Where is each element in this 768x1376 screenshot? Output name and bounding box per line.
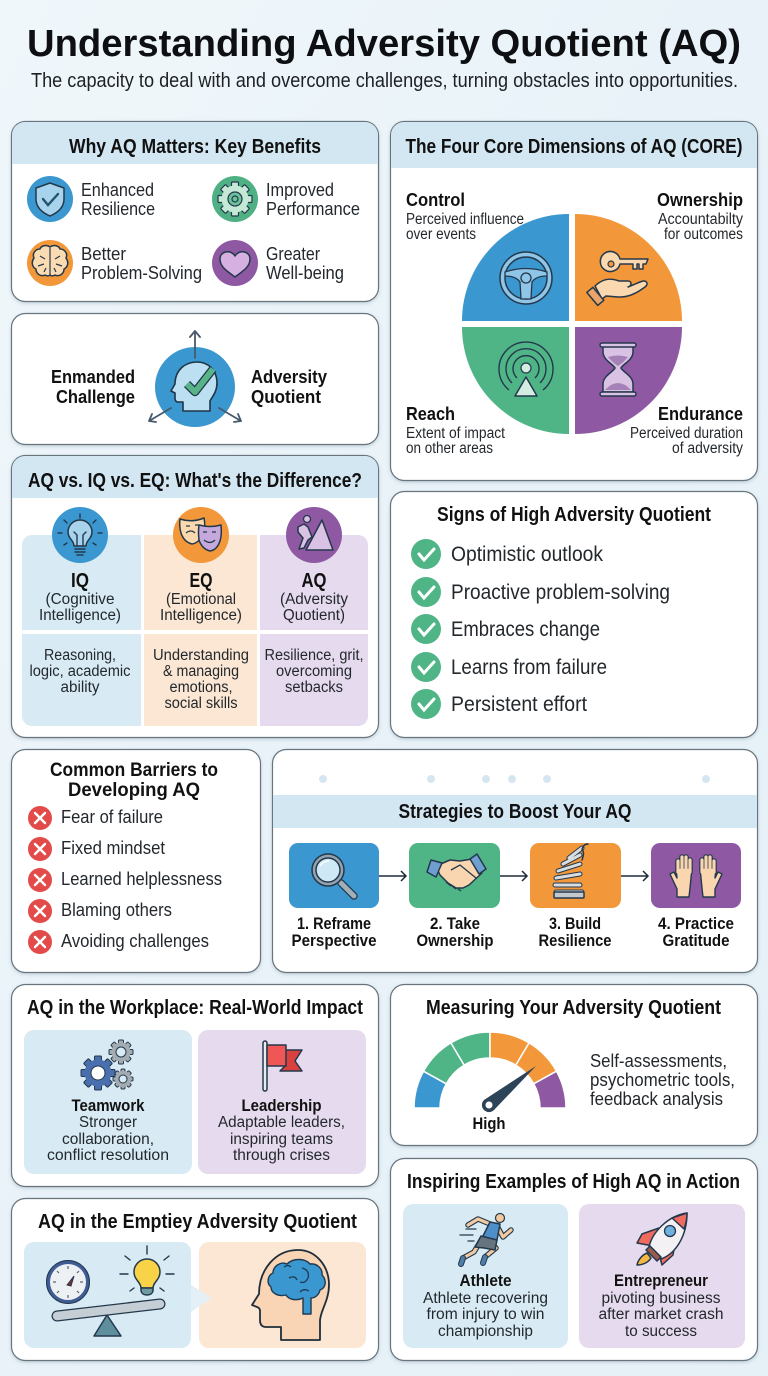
arrow <box>500 871 527 881</box>
panel: emptiey adversity quotient <box>12 1198 378 1360</box>
step 3: build resilience: 3. Build <box>549 915 601 933</box>
column: EQ: & managing <box>163 663 239 680</box>
column: AQ: Quotient) <box>283 607 345 624</box>
label: adversity quotient: Quotient <box>251 386 321 407</box>
icon: head with check and arrows <box>149 331 241 427</box>
icon: brain <box>27 240 73 286</box>
barrier list: Blaming others <box>61 900 172 920</box>
column: AQ: AQ <box>302 570 326 592</box>
card: athlete: Athlete <box>460 1272 512 1290</box>
illustration: head with brain <box>191 1242 366 1348</box>
arrow <box>379 871 406 881</box>
card: teamwork <box>24 1030 192 1174</box>
panel: signs of high AQ <box>390 492 758 738</box>
quadrant: reach <box>462 327 569 434</box>
card: entrepreneur: pivoting business <box>602 1290 721 1307</box>
label: reach: Extent of impact <box>406 425 506 442</box>
card: teamwork: Stronger <box>79 1114 137 1131</box>
text: measuring methods: Self-assessments, <box>590 1051 727 1071</box>
column: EQ: social skills <box>164 695 238 712</box>
step 4: practice gratitude <box>651 843 741 950</box>
column: IQ: (Cognitive <box>46 591 114 608</box>
column: IQ: Intelligence) <box>39 607 121 624</box>
card: athlete: championship <box>438 1323 533 1340</box>
panel: enmanded challenge <box>12 314 378 444</box>
card: entrepreneur <box>579 1204 745 1348</box>
card: athlete <box>403 1204 568 1348</box>
barrier list: Fixed mindset <box>61 838 165 858</box>
benefit: improved performance: Improved <box>266 180 334 200</box>
column: EQ: Intelligence) <box>160 607 242 624</box>
checklist: Embraces change <box>451 618 600 641</box>
label: adversity quotient <box>251 366 328 407</box>
column: EQ: (Emotional <box>166 591 236 608</box>
heading: strategies: Strategies to Boost Your AQ <box>398 801 632 823</box>
column: IQ: Reasoning, <box>44 647 116 664</box>
step 3: build resilience <box>530 843 621 950</box>
step 1: reframe: Perspective <box>292 932 376 950</box>
step 2: take ownership: Ownership <box>416 932 494 950</box>
checklist <box>411 539 670 719</box>
heading: key benefits: Why AQ Matters: Key Benefits <box>69 136 321 158</box>
benefit: improved performance <box>266 180 360 219</box>
column: EQ: emotions, <box>170 679 232 696</box>
benefit: enhanced resilience: Enhanced <box>81 180 154 200</box>
step 1: reframe <box>289 843 379 950</box>
column: IQ <box>22 507 141 726</box>
label: ownership <box>657 189 743 243</box>
benefit: better problem-solving: Better <box>81 244 126 264</box>
barrier list: Fear of failure <box>61 807 163 827</box>
column: EQ: Understanding <box>153 647 249 664</box>
illustration: balance scale <box>24 1242 191 1348</box>
benefit: better problem-solving <box>81 244 202 283</box>
icon: heart <box>212 240 258 286</box>
label: control: Perceived influence <box>406 211 524 228</box>
checklist: Learns from failure <box>451 656 607 679</box>
label: endurance <box>630 403 743 457</box>
barrier list: Avoiding challenges <box>61 931 209 951</box>
step 2: take ownership: 2. Take <box>430 915 480 933</box>
barrier list <box>28 806 222 954</box>
text: measuring methods <box>590 1051 735 1109</box>
heading: difference: AQ vs. IQ vs. EQ: What's the Difference? <box>28 470 362 492</box>
column: AQ: Resilience, grit, <box>264 647 364 664</box>
label: control <box>406 189 524 243</box>
label: endurance: Endurance <box>658 403 743 424</box>
text: measuring methods: feedback analysis <box>590 1089 723 1109</box>
panel: AQ vs IQ vs EQ <box>12 456 378 738</box>
heading: barriers: Developing AQ <box>68 780 200 801</box>
card: entrepreneur: Entrepreneur <box>614 1272 709 1290</box>
label: reach: on other areas <box>406 440 493 457</box>
heading: emptiey: AQ in the Emptiey Adversity Quotient <box>38 1211 357 1233</box>
card: athlete: from injury to win <box>426 1306 544 1323</box>
arrow <box>621 871 648 881</box>
label: endurance: of adversity <box>672 440 743 457</box>
checklist: Proactive problem-solving <box>451 581 670 604</box>
heading: measuring: Measuring Your Adversity Quotient <box>426 997 721 1019</box>
column: AQ: overcoming <box>276 663 352 680</box>
card: leadership: through crises <box>233 1147 330 1164</box>
panel: common barriers <box>12 750 260 972</box>
column: AQ <box>260 507 368 726</box>
card: teamwork: Teamwork <box>72 1097 145 1115</box>
benefit: greater well-being: Greater <box>266 244 320 264</box>
label: ownership: Accountabilty <box>658 211 743 228</box>
step 3: build resilience: Resilience <box>538 932 612 950</box>
card: entrepreneur: after market crash <box>598 1306 724 1323</box>
gauge chart <box>414 1032 566 1133</box>
checklist: Optimistic outlook <box>451 543 603 566</box>
card: leadership <box>198 1030 366 1174</box>
icon: shield <box>27 176 73 222</box>
card: teamwork: conflict resolution <box>47 1147 169 1164</box>
label: ownership: Ownership <box>657 189 743 210</box>
column: EQ: EQ <box>190 570 212 592</box>
gauge chart: High <box>472 1115 506 1133</box>
panel: inspiring examples <box>390 1158 758 1360</box>
heading: signs: Signs of High Adversity Quotient <box>437 504 711 526</box>
heading: barriers <box>50 760 218 801</box>
heading: barriers: Common Barriers to <box>50 760 218 781</box>
benefit: greater well-being: Well-being <box>266 263 344 283</box>
step 2: take ownership <box>409 843 500 950</box>
panel: key benefits <box>12 122 378 302</box>
card: leadership: Adaptable leaders, <box>218 1114 345 1131</box>
step 4: practice gratitude: Gratitude <box>662 932 730 950</box>
heading: workplace: AQ in the Workplace: Real-World Impact <box>27 997 363 1019</box>
label: reach <box>406 403 506 457</box>
column: IQ: ability <box>60 679 100 696</box>
benefit: enhanced resilience <box>81 180 155 219</box>
label: endurance: Perceived duration <box>630 425 743 442</box>
label: control: over events <box>406 226 476 243</box>
benefit: greater well-being <box>266 244 344 283</box>
quadrant: endurance <box>575 327 682 434</box>
icon: gear <box>212 176 258 222</box>
label: ownership: for outcomes <box>664 226 743 243</box>
card: teamwork: collaboration, <box>62 1131 154 1148</box>
label: enmanded challenge: Challenge <box>56 386 135 407</box>
label: reach: Reach <box>406 403 455 424</box>
text: measuring methods: psychometric tools, <box>590 1070 735 1090</box>
quadrant: control <box>462 214 569 321</box>
panel: four core dimensions <box>390 122 758 480</box>
label: enmanded challenge <box>51 366 135 407</box>
panel: workplace <box>12 984 378 1186</box>
panel: strategies <box>272 750 758 972</box>
column: IQ: logic, academic <box>30 663 131 680</box>
checklist: Persistent effort <box>451 693 587 716</box>
card: leadership: Leadership <box>242 1097 322 1115</box>
benefit: better problem-solving: Problem-Solving <box>81 263 202 283</box>
step 4: practice gratitude: 4. Practice <box>658 915 734 933</box>
quadrant: ownership <box>575 214 682 321</box>
card: leadership: inspiring teams <box>230 1131 333 1148</box>
column: IQ: IQ <box>71 570 89 592</box>
label: control: Control <box>406 189 465 210</box>
benefit: enhanced resilience: Resilience <box>81 199 155 219</box>
column: AQ: (Adversity <box>280 591 348 608</box>
step 1: reframe: 1. Reframe <box>297 915 371 933</box>
benefit: improved performance: Performance <box>266 199 360 219</box>
panel: measuring AQ <box>390 984 758 1146</box>
card: entrepreneur: to success <box>625 1323 697 1340</box>
title: Understanding Adversity Quotient (AQ) <box>27 23 741 65</box>
barrier list: Learned helplessness <box>61 869 222 889</box>
column: EQ <box>144 507 257 726</box>
label: enmanded challenge: Enmanded <box>51 366 135 387</box>
card: athlete: Athlete recovering <box>423 1290 548 1307</box>
label: adversity quotient: Adversity <box>251 366 328 387</box>
column: AQ: setbacks <box>285 679 343 696</box>
